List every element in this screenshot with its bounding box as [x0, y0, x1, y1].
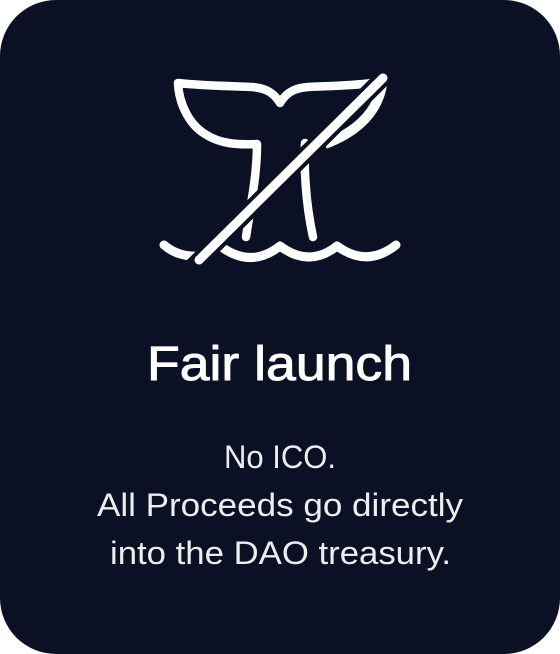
icon part: waves — [164, 245, 396, 258]
text line 2: All Proceeds go directly — [97, 487, 463, 523]
text line 3: into the DAO treasury. — [110, 535, 451, 571]
heading: Fair launch — [147, 338, 412, 391]
icon: crossed-out whale tail — [164, 69, 396, 269]
text line 1: No ICO. — [224, 439, 336, 475]
icon part: slash cut-out — [190, 69, 392, 269]
icon part: slash — [199, 78, 383, 260]
icon part: whale tail outline — [178, 83, 372, 237]
icon part: right fluke — [325, 85, 382, 144]
text block: description — [97, 439, 463, 571]
